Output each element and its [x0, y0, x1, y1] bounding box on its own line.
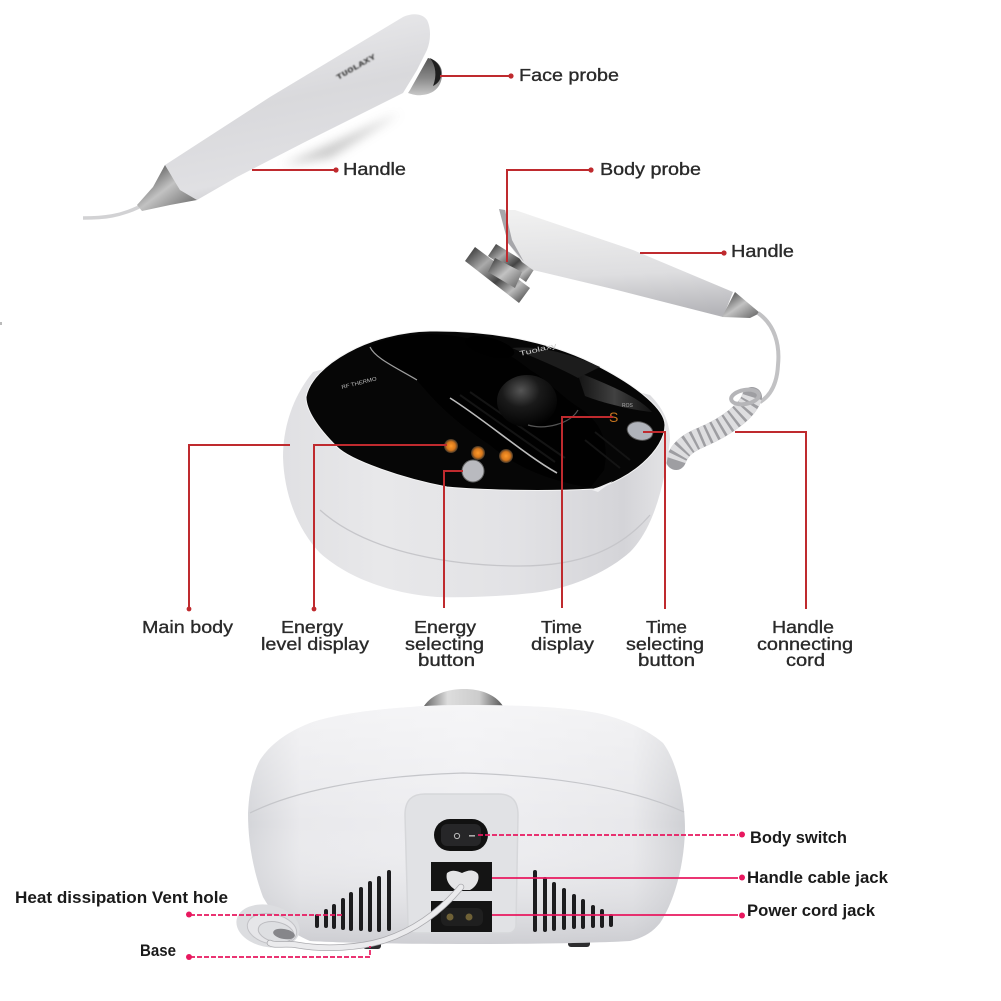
callout: time selecting button: [626, 432, 704, 670]
coiled cord: [676, 388, 760, 460]
handle cable jack: [431, 862, 492, 891]
upper probe cavity: [464, 332, 516, 362]
upper sheen band: [512, 347, 600, 378]
callout: time display: display: [531, 634, 594, 654]
wand shadow: [283, 113, 400, 165]
rear seam: [250, 773, 684, 813]
callout: main body: [142, 445, 290, 637]
device white body: [283, 340, 670, 597]
callout: body probe: Body probe: [600, 159, 701, 179]
handle shaded neck: [499, 209, 524, 262]
black control top: [306, 331, 665, 490]
power cord jack: [431, 901, 492, 932]
panel: face probe: [83, 14, 442, 218]
callout: time selecting button: button: [638, 650, 695, 670]
callout: energy level display: level display: [261, 634, 369, 654]
brand text: Tuolaxy: [519, 342, 558, 358]
callout: energy level display: [261, 445, 447, 654]
right vent: [535, 872, 611, 930]
right sheen sector: [577, 372, 652, 412]
callout: heat dissipation vent hole: Heat dissipation Vent hole: [15, 889, 228, 907]
callout: body handle: Handle: [731, 241, 794, 261]
callout: face handle: [252, 159, 406, 179]
rear recessed niche: [405, 794, 518, 933]
face probe metal tip: [137, 165, 197, 211]
callout: handle connecting cord: Handle: [772, 617, 834, 637]
rear dome: [424, 689, 503, 706]
probe cradle recess: [372, 334, 606, 488]
handle cord with coil: [232, 887, 461, 953]
callout: face probe: [440, 65, 619, 85]
callout: power cord jack: Power cord jack: [747, 902, 876, 920]
callout: body handle: [640, 241, 794, 261]
time button: [625, 419, 655, 443]
face probe logo: TUOLAXY: [336, 53, 379, 83]
body probe handle body: [500, 210, 733, 317]
callout: energy selecting button: button: [418, 650, 475, 670]
callout: time selecting button: selecting: [626, 634, 704, 654]
body seam: [320, 510, 650, 566]
callout: energy selecting button: [405, 471, 484, 670]
callout: power cord jack: [492, 902, 876, 920]
body switch: [434, 819, 488, 851]
stray mark: [0, 322, 2, 325]
feet: [363, 938, 590, 949]
face probe metal head: [408, 58, 442, 95]
panel: rear view device: [232, 689, 685, 953]
callout: body switch: [478, 829, 847, 847]
callout: heat dissipation vent hole: [15, 889, 342, 918]
recess highlight: [370, 347, 417, 380]
face probe handle body: [165, 14, 430, 200]
callout: time display: [531, 417, 613, 654]
cord notch: [592, 481, 613, 492]
callout: handle cable jack: [492, 869, 889, 887]
panel: body probe: [465, 209, 778, 402]
rear body: [248, 705, 685, 944]
body probe metal head: [465, 244, 535, 303]
energy button: [462, 460, 484, 482]
energy LEDs: [444, 439, 513, 463]
recess edge highlight: [450, 398, 557, 473]
callout: base: Base: [140, 942, 176, 960]
callout: time selecting button: Time: [646, 617, 687, 637]
recess ball: [497, 375, 557, 427]
face probe cord: [83, 207, 139, 218]
groove lines: [460, 392, 630, 468]
callout: body switch: Body switch: [750, 829, 847, 847]
callout: main body: Main body: [142, 617, 233, 637]
model text: RF THERMO: [341, 376, 378, 391]
left vent: [317, 872, 389, 930]
callout: time display: Time: [541, 617, 582, 637]
time digit display: S: [609, 409, 618, 425]
callout: energy selecting button: selecting: [405, 634, 484, 654]
callout: handle connecting cord: cord: [786, 650, 825, 670]
jack plug: [447, 870, 479, 890]
panel: main device: [283, 331, 760, 597]
callout: energy level display: Energy: [281, 617, 343, 637]
callout: base: [140, 942, 370, 960]
body probe cord: [758, 313, 778, 402]
callout: handle cable jack: Handle cable jack: [747, 869, 889, 887]
RoS text: ROS: [622, 403, 634, 409]
callout: body probe: [507, 159, 701, 262]
ball base edge: [528, 410, 578, 427]
callout: face handle: Handle: [343, 159, 406, 179]
callout: face probe: Face probe: [519, 65, 619, 85]
callout: handle connecting cord: connecting: [757, 634, 853, 654]
callout: handle connecting cord: [735, 432, 853, 670]
body probe metal tip: [722, 292, 760, 318]
callout: energy selecting button: Energy: [414, 617, 476, 637]
